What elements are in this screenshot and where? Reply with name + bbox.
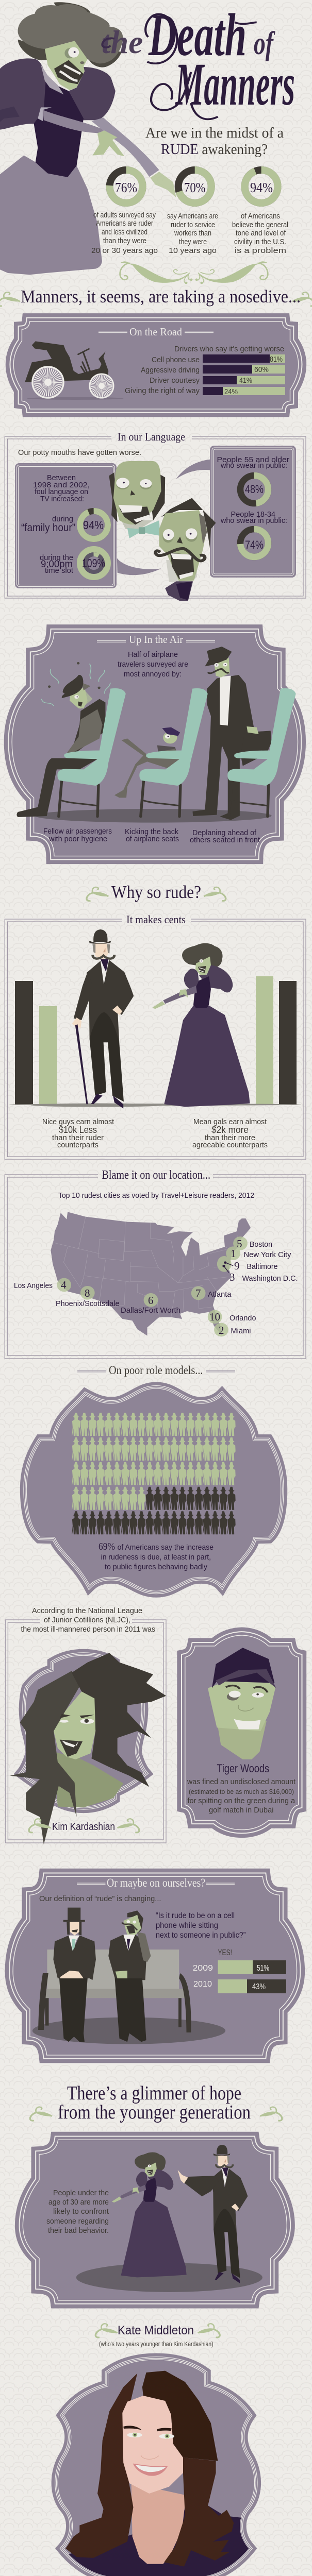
map: rudest US cities: 10 [209,1311,220,1323]
panel: on the road: On the Road [129,326,182,338]
panel: in our language [5,430,306,601]
heading: glimmer of hope [30,2082,282,2123]
stat text columns: they were [179,238,207,246]
bar chart: drivers: Cell phone use [152,355,200,364]
bar chart: drivers: Aggressive driving [141,366,200,375]
callout: TV language: 9:00pm [41,559,73,570]
panel: younger generation: age of 30 are more [48,2198,109,2207]
ornament: flourish [120,261,268,284]
panel: up in the air: others seated in front [190,836,260,844]
callout: TV language [15,463,117,588]
portrait panel: Kate Middleton [58,2360,255,2576]
text: mean gals: Mean gals earn almost [193,1118,267,1126]
map: rudest US cities: 1 [231,1247,236,1260]
text: nice guys: counterparts [57,1141,98,1149]
panel: or maybe on ourselves: Our definition of “rude” is changing... [39,1894,161,1903]
callout: TV language: 1998 and 2002, [33,481,90,489]
stat text columns: believe the general [232,221,288,229]
text: mean gals: $2k more [211,1125,249,1135]
illustration: phone on a bench [32,1908,225,2044]
panel: role models pictogram [26,1388,281,1591]
stat ring 76%: 76% [115,180,137,195]
stat text columns: and less civilized [102,228,147,236]
text: nice guys: $10k Less [59,1125,97,1135]
bar chart: drivers: Drivers who say it's getting worse [174,345,284,353]
panel: Kim Kardashian: the most ill-mannered person in 2011 was [21,1625,155,1634]
map: rudest US cities: 3 [229,1271,235,1283]
map: rudest US cities: 2 [219,1324,224,1336]
text: 69 percent: of Americans say the increase [118,1543,214,1552]
callout: who swears: People 18-34 [231,510,275,519]
panel: Tiger Woods: Tiger Woods [217,1762,269,1775]
text: 69 percent: 69% [98,1541,115,1552]
panel: up in the air: with poor hygiene [48,835,107,843]
panel: up in the air: most annoyed by: [124,670,182,679]
panel: Tiger Woods: was fined an undisclosed amount [187,1777,296,1786]
panel: younger generation [23,2140,287,2300]
panel: Kim Kardashian: of Junior Cotillions (NLJC), [44,1616,130,1624]
stat ring 70%: 70% [184,180,205,195]
map: rudest US cities: 4 [61,1279,67,1291]
subtitle: RUDE awakening? [161,141,268,158]
heading: on poor role models: On poor role models... [109,1364,203,1377]
panel: up in the air: of airplane seats [126,835,179,843]
panel: it makes cents [5,913,306,1160]
map: rudest US cities: Washington D.C. [242,1274,298,1283]
passenger one [17,675,105,817]
title: Death [148,1,247,69]
passenger three [192,647,272,820]
callout: TV language: 109% [82,556,105,570]
stat text columns: tone and level of [236,229,286,238]
callout: who swears: People 55 and older [217,455,289,464]
label: Kim Kardashian [29,1819,139,1833]
text: nice guys [42,1118,114,1149]
passenger two [114,727,180,798]
stat text columns: 20 or 30 years ago [91,247,158,255]
callout: who swears: who swear in public: [220,516,287,525]
panel: Tiger Woods [185,1635,299,1830]
map: rudest US cities: New York City [243,1250,291,1259]
map: rudest US cities: 5 [237,1238,242,1250]
panel: it makes cents: It makes cents [126,913,186,926]
map: rudest US cities: 7 [195,1287,201,1299]
bar chart: drivers [125,345,285,396]
callout: TV language: foul language on [35,488,88,496]
panel: or maybe on ourselves: Or maybe on ourselves? [107,1876,205,1889]
stat ring 94%: 94% [250,180,273,195]
panel: in our language: Our potty mouths have gotten worse. [18,448,141,457]
stat text columns: Americans are ruder [96,219,153,228]
bar chart: yes answers: 43% [252,1982,266,1991]
panel: blame it on our location [5,1168,306,1359]
heading: glimmer of hope: from the younger generation [58,2102,251,2123]
illustration: screaming zombie woman [0,2,176,275]
stat ring 94% [245,170,278,203]
bar chart: drivers: 81% [270,355,283,364]
panel: blame it on our location: Blame it on our location... [102,1168,210,1182]
label: Kim Kardashian: Kim Kardashian [52,1821,115,1833]
panel: on the road [13,321,299,409]
text: nice guys: than their ruder [52,1134,104,1142]
map: rudest US cities: Orlando [229,1314,256,1323]
illustration: mean gal [152,943,250,1107]
panel: up in the air: Half of airplane [128,650,178,659]
panel: Kim Kardashian [5,1607,166,1844]
text: survey question [156,1911,245,1957]
heading: why so rude: Why so rude? [111,882,201,902]
callout: TV language: during the [40,554,73,562]
stat text columns: civility in the U.S. [234,238,286,246]
stat text columns [91,211,288,255]
text: nice guys: Nice guys earn almost [42,1118,114,1126]
stat text columns: ruder to service [171,221,215,229]
text: 69 percent [98,1541,214,1571]
callout: who swears: who swear in public: [220,461,287,470]
text: 69 percent: to public figures behaving badly [105,1563,207,1571]
callout: who swears [210,446,296,578]
panel: in our language: In our Language [118,430,185,443]
map: rudest US cities: 8 [85,1287,90,1299]
callout: TV language: 94% [83,518,104,532]
panel: up in the air: Kicking the back [125,827,178,836]
illustration: two cursing zombies [109,461,216,601]
map: rudest US cities: Phoenix/Scottsdale [56,1299,120,1308]
stat ring 76% [110,170,143,203]
bar chart: drivers: Giving the right of way [125,386,200,395]
stat text columns: workers than [174,229,211,238]
bar chart: drivers: 41% [239,376,252,385]
pictogram: 69 of 100 people [72,1413,236,1534]
stat text columns: of Americans [241,212,280,221]
callout: who swears: 48% [245,483,264,496]
bar chart: yes answers [193,1960,286,1993]
callout: TV language: time slot [45,567,73,575]
panel: Tiger Woods: for spitting on the green during a [188,1797,295,1805]
callout: TV language: during [52,515,73,523]
map: rudest US cities: Atlanta [208,1290,232,1299]
panel: blame it on our location: Top 10 rudest cities as voted by Travel+Leisure readers, 2012 [58,1192,254,1200]
bar chart: earnings [9,976,301,1107]
bar chart: drivers: 60% [254,365,269,374]
bar chart: yes answers: 51% [257,1964,269,1973]
panel: younger generation: likely to confront [53,2207,109,2216]
illustration: nice guy [72,929,134,1109]
panel: younger generation: someone regarding [46,2217,109,2226]
panel: up in the air: Fellow air passengers [43,827,112,836]
title: of [254,25,275,61]
map: rudest US cities: 9 [234,1260,239,1272]
illustration: airline passengers [17,647,296,823]
illustration: gal confronted by gent [112,2145,248,2283]
map: rudest US cities: Boston [250,1240,272,1249]
speech bubble: tails [117,460,211,575]
text: mean gals: than their more [205,1134,255,1142]
map: rudest US cities: Los Angeles [14,1281,53,1290]
panel: up in the air: Up In the Air [129,633,183,646]
text: survey question: phone while sitting [156,1921,218,1930]
callout: TV language: TV increased: [40,495,84,503]
map: rudest US cities [14,1212,298,1336]
title: the [102,24,143,60]
panel: up in the air: Deplaning ahead of [192,828,257,837]
stat text columns: than they were [103,237,146,245]
text: survey question: YES! [218,1948,232,1957]
bar chart: drivers: 24% [224,387,238,396]
heading: Kate Middleton: Kate Middleton [118,2324,194,2337]
subtitle: Are we in the midst of a [145,125,284,141]
panel: Tiger Woods: golf match in Dubai [209,1806,273,1815]
stat text columns: of adults surveyed say [93,211,156,219]
map: rudest US cities: Miami [231,1327,251,1335]
subtitle [145,125,284,158]
map: rudest US cities: 6 [148,1294,154,1307]
text: survey question: next to someone in public?” [156,1931,245,1940]
text: survey question: “Is it rude to be on a cell [156,1911,235,1920]
text: 69 percent: in rudeness is due, at least in part, [101,1553,211,1562]
title [102,1,295,119]
panel: younger generation: their bad behavior. [48,2226,109,2235]
panel: up in the air: travelers surveyed are [118,660,188,669]
callout: TV language: “family hour” [21,522,75,534]
map: rudest US cities: Dallas/Fort Worth [121,1306,180,1315]
panel: younger generation: People under the [53,2189,109,2197]
panel: Kim Kardashian: According to the National League [32,1607,142,1615]
callout: who swears: 74% [245,538,264,551]
panel: Tiger Woods: (estimated to be as much as $16,000) [189,1788,294,1795]
panel: up in the air [12,633,298,856]
stat text columns: 10 years ago [169,247,217,255]
bar chart: drivers: Driver courtesy [150,376,200,385]
bar chart: yes answers: 2010 [193,1980,212,1989]
stat ring 70% [178,170,211,203]
heading: Kate Middleton [95,2324,220,2348]
text: mean gals [192,1118,268,1149]
portrait: Kim [10,1653,166,1844]
callout: TV language: Between [47,474,76,482]
stat text columns: is a problem [235,247,286,255]
map: rudest US cities: Baltimore [247,1262,277,1271]
heading: glimmer of hope: There’s a glimmer of hope [67,2082,241,2104]
heading: Kate Middleton: (who's two years younger than Kim Kardashian) [99,2340,214,2348]
icon: vintage car [25,341,124,400]
bar chart: yes answers: 2009 [193,1964,213,1973]
text: mean gals: agreeable counterparts [192,1141,268,1149]
portrait: Tiger [208,1648,276,1759]
stat text columns: say Americans are [167,212,218,221]
panel: or maybe on ourselves [13,1876,297,2055]
